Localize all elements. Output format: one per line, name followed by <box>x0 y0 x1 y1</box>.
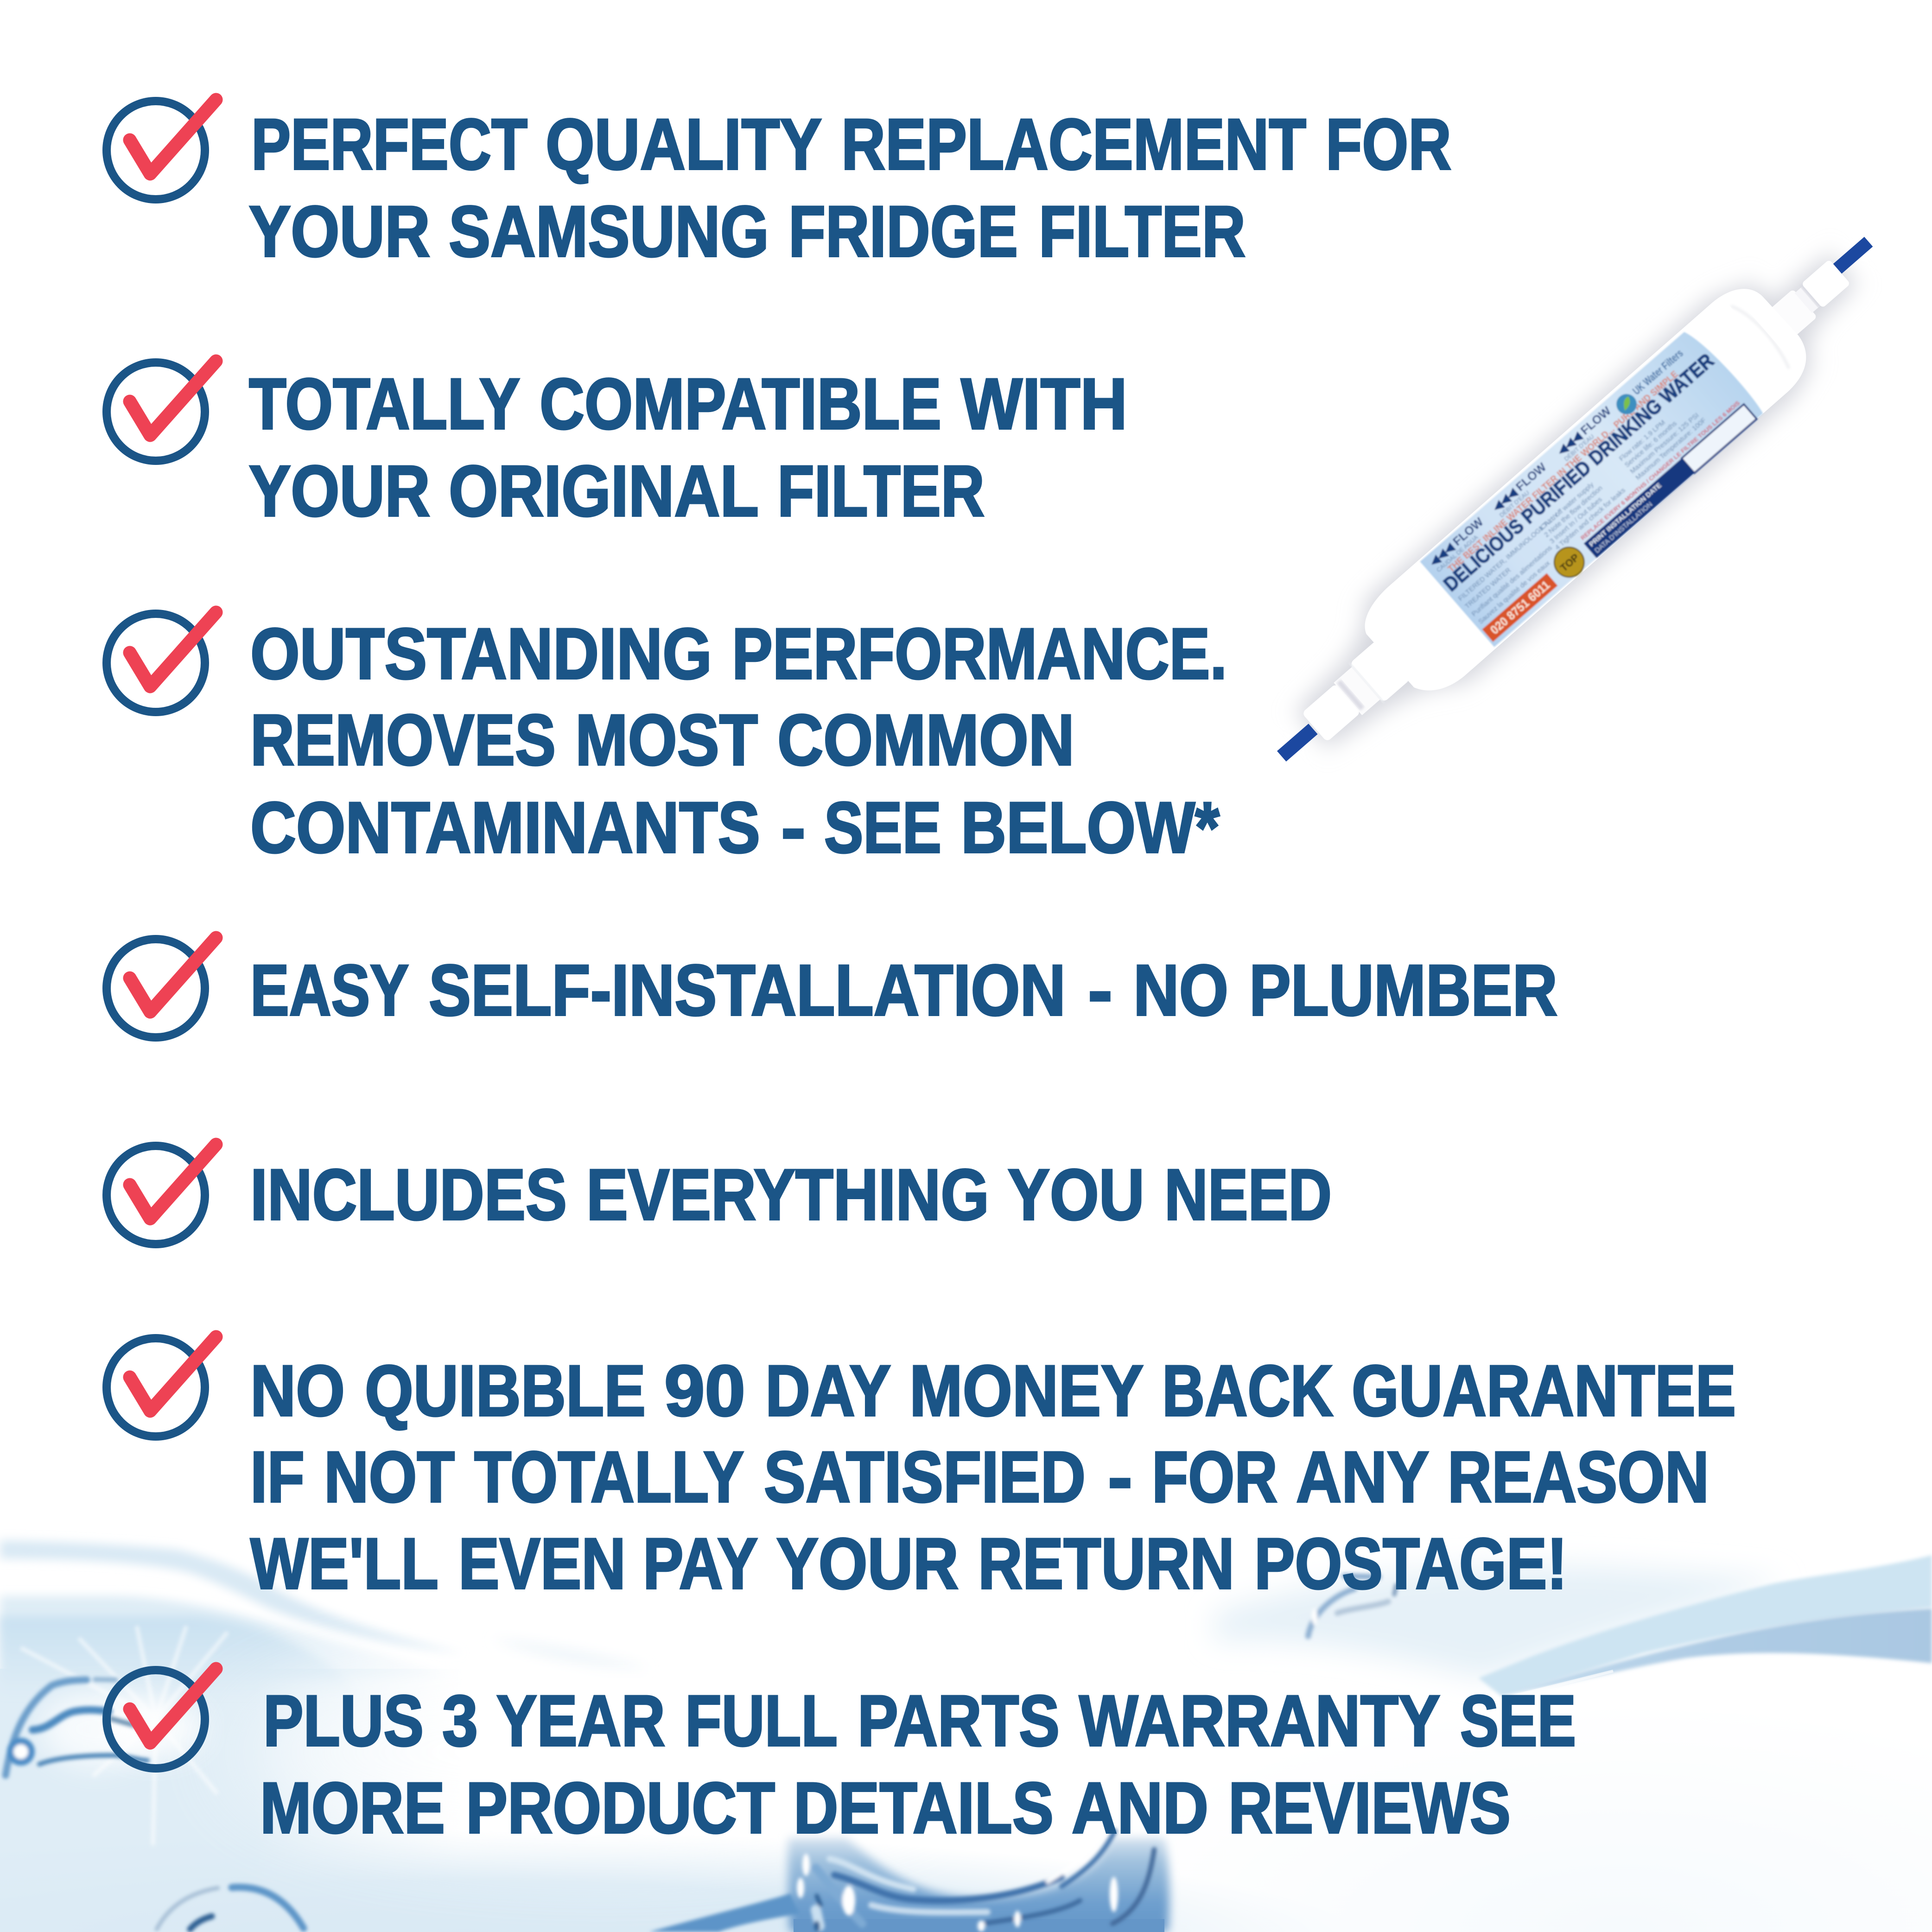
text: money back guarantee: POSTAGE! <box>1254 1524 1567 1604</box>
text: money back guarantee: NOT <box>324 1437 455 1518</box>
blue tube left <box>1277 724 1318 762</box>
bottom-left water drop <box>157 1887 304 1929</box>
text: warranty: 3 <box>442 1681 478 1761</box>
text: warranty: MORE <box>260 1768 445 1849</box>
text: includes everything <box>250 1155 1332 1235</box>
text: easy self-installation <box>250 950 1557 1031</box>
text: easy self-installation: PLUMBER <box>1249 950 1557 1031</box>
text: warranty: REVIEWS <box>1228 1768 1511 1849</box>
text: outstanding performance <box>250 614 1227 868</box>
text: money back guarantee: REASON <box>1448 1437 1709 1518</box>
icon: check 4 <box>107 938 216 1037</box>
date write-in box <box>1682 404 1757 473</box>
multilingual flow captions: DÉBIT D'EAU <box>1498 489 1531 519</box>
text: totally compatible: YOUR <box>249 451 430 532</box>
text: warranty: PLUS <box>263 1681 424 1761</box>
text: money back guarantee <box>250 1351 1736 1604</box>
text: money back guarantee: ANY <box>1296 1437 1429 1518</box>
text: outstanding performance: CONTAMINANTS <box>250 788 760 868</box>
flow markers <box>1426 404 1614 569</box>
text: outstanding performance: COMMON <box>777 700 1074 781</box>
text: totally compatible <box>249 364 1127 532</box>
text: includes everything: INCLUDES <box>250 1155 567 1235</box>
flow markers: ◀◀◀ FLOW <box>1489 460 1549 515</box>
text: includes everything: YOU <box>1008 1155 1144 1235</box>
text: perfect quality replacement: FOR <box>1326 104 1451 185</box>
icon: check 2 <box>107 361 216 461</box>
background: water splash artwork <box>0 1540 1932 1932</box>
fittings and necks <box>1298 252 1857 748</box>
text: money back guarantee: MONEY <box>909 1351 1144 1431</box>
flow markers: ◀◀◀ FLOW <box>1426 515 1486 569</box>
instructions: Flow rate: 1.9 LPM <box>1618 419 1667 463</box>
text: money back guarantee: BACK <box>1162 1351 1333 1431</box>
text: money back guarantee: QUIBBLE <box>365 1351 646 1431</box>
left water drop <box>6 1679 147 1775</box>
instructions: 4 Tighten and check for leaks <box>1554 486 1627 552</box>
text: totally compatible: TOTALLY <box>249 364 520 445</box>
tagline: THE BEST INLINE WATER FILTER IN THE WORLD... PURE AND SIMPLE <box>1446 369 1680 574</box>
text: outstanding performance: BELOW* <box>961 788 1220 868</box>
text: warranty: FULL <box>685 1681 838 1761</box>
instructions: 3 Insert In / Out tubes <box>1548 496 1604 545</box>
text: easy self-installation: NO <box>1133 950 1228 1031</box>
text: money back guarantee: IF <box>250 1437 305 1518</box>
text: warranty: WARRANTY <box>1079 1681 1440 1761</box>
instructions: Maximum Pressure: 125 PSI <box>1628 411 1701 475</box>
text: money back guarantee: PAY <box>643 1524 758 1604</box>
text: money back guarantee: SATISFIED <box>764 1437 1086 1518</box>
multilingual flow captions <box>1435 433 1595 573</box>
multilingual flow captions: CAUDAL DE AGUA <box>1435 534 1480 573</box>
text: perfect quality replacement: QUALITY <box>546 104 822 185</box>
text: outstanding performance: REMOVES <box>250 700 556 781</box>
instructions: Service life: 6 months <box>1623 419 1678 469</box>
cap ridge line <box>1731 300 1793 370</box>
text: perfect quality replacement <box>249 104 1451 272</box>
text: money back guarantee: YOUR <box>776 1524 959 1604</box>
text: money back guarantee: NO <box>250 1351 345 1431</box>
text: money back guarantee: GUARANTEE <box>1352 1351 1736 1431</box>
text: perfect quality replacement: PERFECT <box>251 104 527 185</box>
text: warranty: AND <box>1072 1768 1208 1849</box>
text: totally compatible: COMPATIBLE <box>540 364 941 445</box>
instructions <box>1457 397 1711 626</box>
text: perfect quality replacement: FRIDGE <box>788 191 1018 272</box>
product image: inline water filter <box>1240 197 1913 805</box>
blue tube right <box>1832 237 1873 275</box>
text: money back guarantee: 90 <box>664 1351 745 1431</box>
text: money back guarantee: TOTALLY <box>474 1437 744 1518</box>
install date bar: PRINT INSTALLATION DATE <box>1588 481 1663 548</box>
text: includes everything: NEED <box>1164 1155 1332 1235</box>
text: easy self-installation: EASY <box>250 950 409 1031</box>
instructions: Maximum Temperature: 100F <box>1634 416 1708 482</box>
gold seal: TOP <box>1558 552 1581 574</box>
text: outstanding performance: PERFORMANCE. <box>732 614 1227 694</box>
brand logo <box>1612 347 1690 419</box>
text: warranty <box>260 1681 1576 1849</box>
instructions: FILTERED WATER, IMMUNOLOGICALLY <box>1457 511 1560 603</box>
icon: check 5 <box>107 1144 216 1244</box>
orange phone box: 020 8751 6011 <box>1487 578 1552 637</box>
text: includes everything: EVERYTHING <box>586 1155 989 1235</box>
text: warranty: PRODUCT <box>466 1768 775 1849</box>
text: outstanding performance: - <box>781 788 806 868</box>
replacement warning: REPLACE EVERY 6 MONTHS / CHANGER LE FILTRE TOUS LES 6 MOIS <box>1579 399 1741 541</box>
text: money back guarantee: - <box>1108 1437 1132 1518</box>
bottom-centre water crown <box>649 1822 1169 1932</box>
install date bar <box>1583 458 1694 558</box>
install date bar: DATA D'INSTALLATION <box>1593 500 1654 555</box>
text: money back guarantee: EVEN <box>458 1524 626 1604</box>
filter soft shadow halo <box>1272 222 1884 777</box>
brand logo: UK Water Filters <box>1630 347 1686 397</box>
text: warranty: YEAR <box>496 1681 665 1761</box>
text: money back guarantee: DAY <box>765 1351 891 1431</box>
text: totally compatible: ORIGINAL <box>449 451 759 532</box>
icon: check 6 <box>107 1337 216 1436</box>
icon: check 1 <box>107 100 216 199</box>
instructions: 2 Note the flow direction <box>1543 484 1604 539</box>
instructions: TREATED WATER <box>1463 566 1513 610</box>
mid water drop <box>1308 1576 1396 1636</box>
flow markers: ◀◀◀ FLOW <box>1554 404 1614 458</box>
text: outstanding performance: MOST <box>575 700 758 781</box>
text: outstanding performance: OUTSTANDING <box>250 614 712 694</box>
filter label <box>1420 326 1765 647</box>
text: easy self-installation: - <box>1088 950 1112 1031</box>
text: money back guarantee: WE'LL <box>250 1524 439 1604</box>
icon: check 7 <box>107 1669 216 1768</box>
instructions: 1 Turn off water supply <box>1537 481 1595 533</box>
text: perfect quality replacement: FILTER <box>1039 191 1246 272</box>
text: outstanding performance: SEE <box>824 788 941 868</box>
text: easy self-installation: SELF-INSTALLATION <box>429 950 1066 1031</box>
icon: check 3 <box>107 612 216 712</box>
text: perfect quality replacement: YOUR <box>249 191 430 272</box>
multilingual flow captions: DÉBIT D'EAU <box>1563 433 1595 463</box>
gold seal <box>1548 541 1590 583</box>
text: totally compatible: FILTER <box>777 451 985 532</box>
text: perfect quality replacement: REPLACEMENT <box>841 104 1306 185</box>
bright rays around last check icon <box>21 1626 228 1845</box>
text: money back guarantee: RETURN <box>978 1524 1234 1604</box>
text: totally compatible: WITH <box>961 364 1127 445</box>
instructions: Purifiant qualité des alimentations <box>1470 544 1554 618</box>
text: warranty: PARTS <box>858 1681 1060 1761</box>
instructions: Sauvez la qualité de vos eaux <box>1477 559 1552 626</box>
text: warranty: DETAILS <box>794 1768 1054 1849</box>
text: warranty: SEE <box>1460 1681 1576 1761</box>
text: money back guarantee: FOR <box>1152 1437 1277 1518</box>
main label title: DELICIOUS PURIFIED DRINKING WATER <box>1439 349 1718 596</box>
filter body <box>1351 274 1823 706</box>
text: perfect quality replacement: SAMSUNG <box>449 191 769 272</box>
